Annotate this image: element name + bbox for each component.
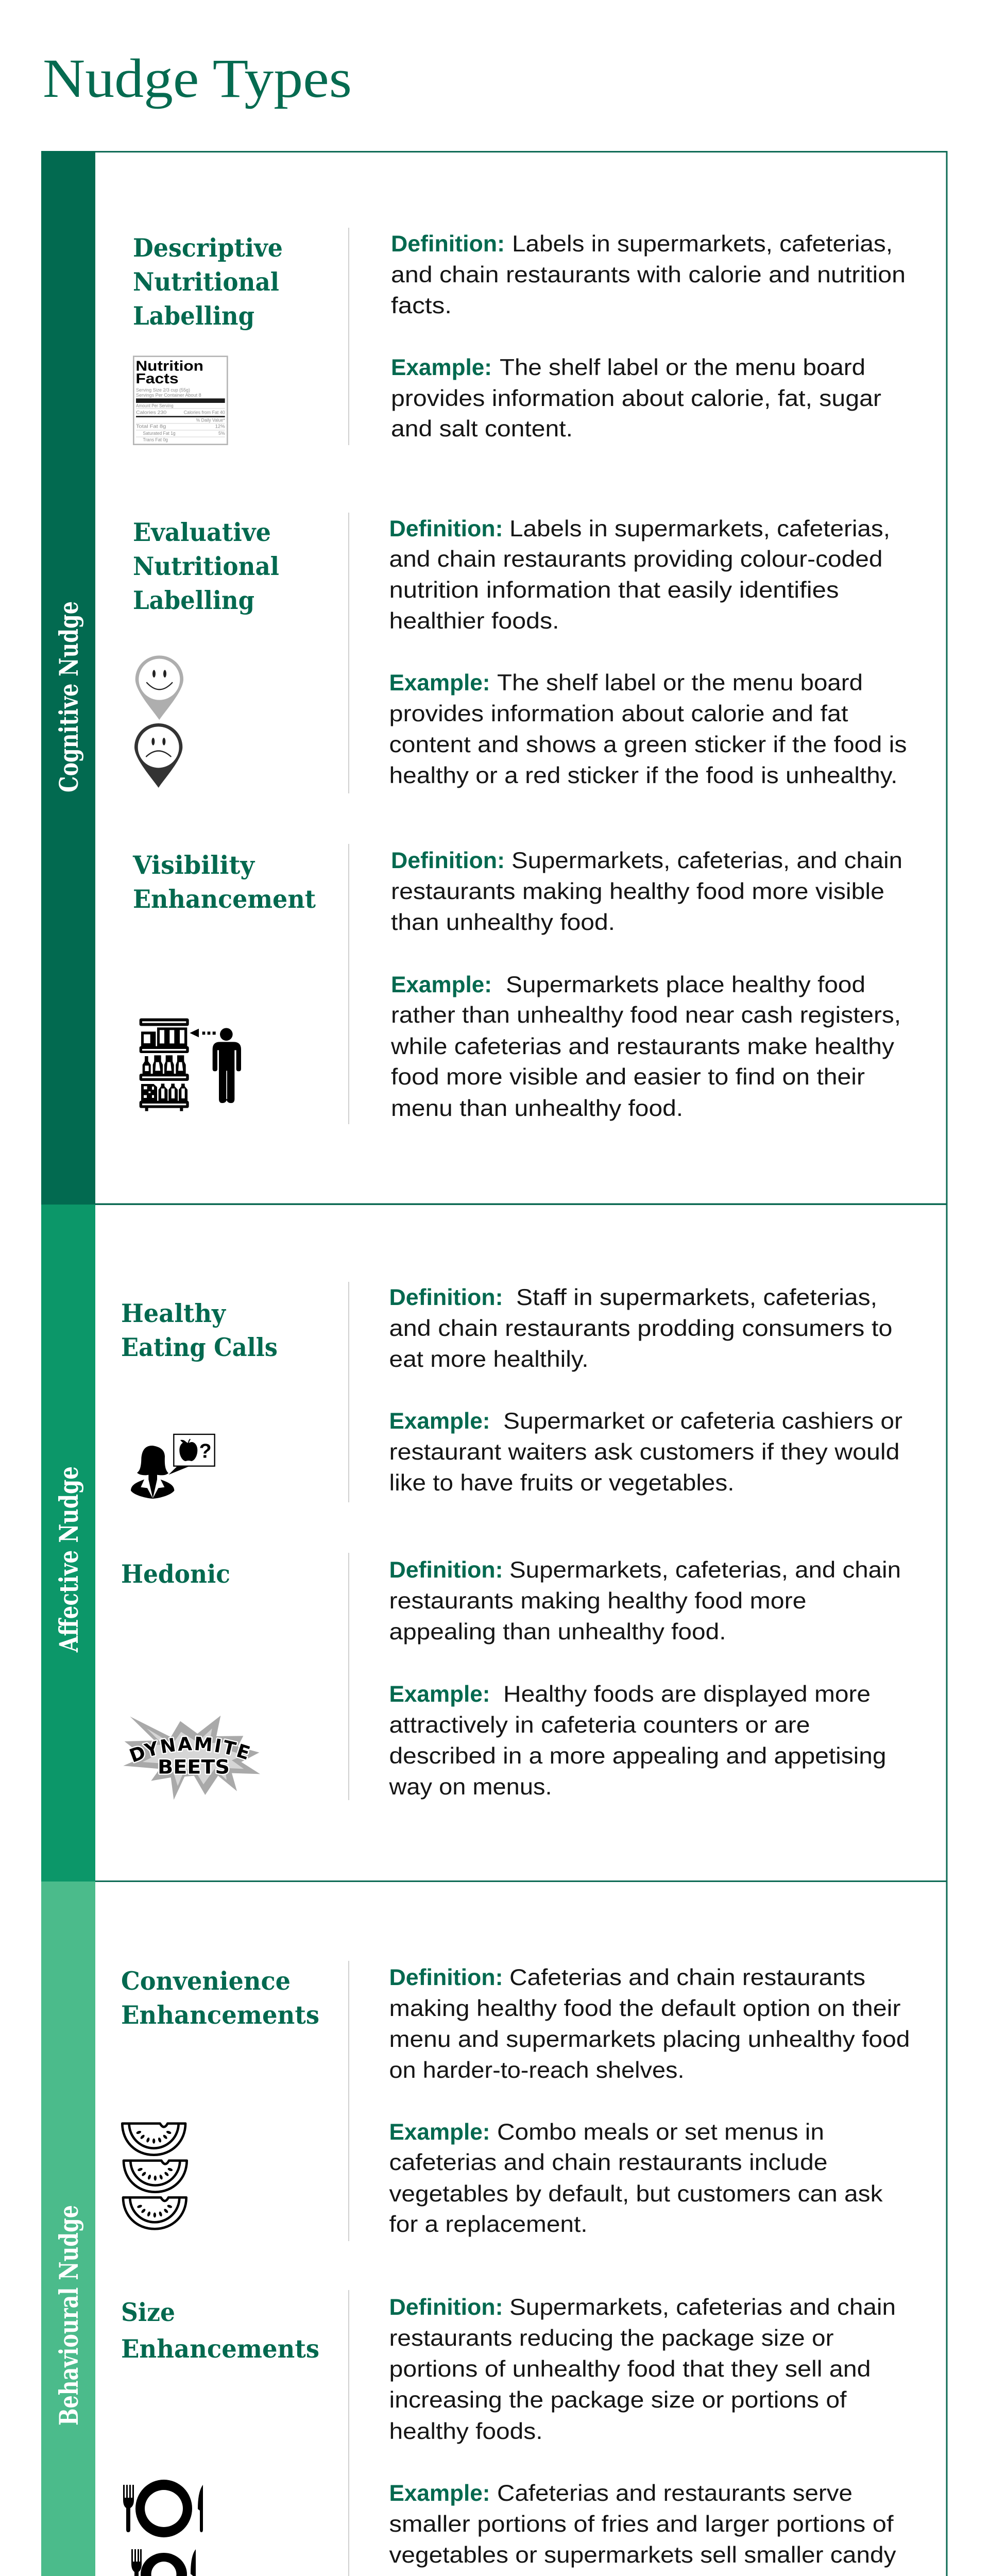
example text: way on menus. [388, 1774, 552, 1800]
example text: like to have fruits or vegetables. [389, 1470, 735, 1496]
heading: healthy eating calls: Healthy [121, 1298, 226, 1328]
definition text: and chain restaurants prodding consumers to [389, 1316, 892, 1341]
example text [389, 670, 907, 788]
divider [348, 2290, 349, 2576]
example text: food more visible and easier to find on their [391, 1064, 865, 1090]
example text: provides information about calorie, fat, sugar [391, 386, 881, 411]
definition text: Definition: [389, 2295, 503, 2320]
divider [348, 513, 349, 793]
definition text: Labels in supermarkets, cafeterias, [512, 231, 893, 257]
icon: nutrition facts label: Facts [135, 370, 179, 386]
icon: nutrition facts label: Amount Per Serving [136, 403, 174, 409]
example text: while cafeterias and restaurants make healthy [390, 1034, 895, 1059]
example text [389, 1409, 902, 1496]
heading: convenience enhancements: Convenience [121, 1966, 291, 1996]
definition text: Definition: [391, 848, 505, 873]
example text: described in a more appealing and appetising [389, 1743, 886, 1769]
heading: convenience enhancements: Enhancements [121, 2000, 319, 2030]
icon: nutrition facts label [133, 357, 227, 445]
definition text [391, 231, 906, 318]
panel: affective nudge [41, 1205, 902, 1882]
definition text: healthy foods. [389, 2419, 543, 2444]
definition text [391, 848, 902, 935]
divider [348, 1553, 349, 1800]
icon: nutrition facts label: Calories from Fat 40 [184, 410, 225, 415]
icon: unhappy pin [134, 723, 182, 788]
example text: for a replacement. [389, 2212, 587, 2237]
icon: happy pin [135, 655, 183, 720]
shelves [140, 1019, 189, 1111]
heading: visibility enhancement: Visibility [132, 850, 255, 880]
example text: healthy or a red sticker if the food is unhealthy. [389, 763, 897, 788]
sidebar: behavioural nudge [41, 1882, 95, 2576]
definition text: than unhealthy food. [391, 910, 615, 935]
definition text: Supermarkets, cafeterias, and chain [509, 1557, 901, 1583]
heading: healthy eating calls: Eating Calls [121, 1332, 278, 1362]
heading: descriptive nutritional labelling: Nutritional [133, 267, 279, 297]
heading: descriptive nutritional labelling: Descriptive [133, 233, 283, 263]
example text: restaurant waiters ask customers if they would [389, 1439, 899, 1465]
row: descriptive nutritional labelling [133, 228, 906, 445]
definition text: restaurants reducing the package size or [389, 2326, 834, 2351]
example text: Combo meals or set menus in [497, 2120, 824, 2145]
definition text: facts. [391, 293, 452, 318]
definition text: restaurants making healthy food more [389, 1588, 807, 1614]
panel: behavioural nudge [41, 1882, 910, 2576]
icon: nutrition facts label: Saturated Fat 1g [143, 431, 176, 436]
row: visibility enhancement [132, 844, 902, 1124]
definition text: appealing than unhealthy food. [389, 1619, 726, 1645]
definition text: Definition: [389, 516, 503, 541]
large plate with cutlery [123, 2480, 203, 2537]
title: Nudge Types [43, 48, 352, 109]
sidebar: affective nudge: Affective Nudge [54, 1466, 84, 1653]
definition text: Supermarkets, cafeterias, and chain [511, 848, 902, 873]
definition text: Labels in supermarkets, cafeterias, [509, 516, 890, 541]
icon: nutrition facts label: Total Fat 8g [136, 424, 166, 429]
heading: descriptive nutritional labelling: Labelling [133, 301, 254, 331]
definition text: and chain restaurants providing colour-coded [389, 547, 883, 572]
example text: Example: [391, 355, 492, 380]
heading: hedonic: Hedonic [121, 1559, 230, 1589]
icon: nutrition facts label: 5% [218, 431, 225, 436]
watermelon slice 1 [122, 2124, 185, 2155]
definition text: Definition: [391, 231, 505, 257]
heading: size enhancements [121, 2297, 319, 2364]
definition text: on harder-to-reach shelves. [389, 2058, 684, 2083]
icon: smiley and sad map pins [134, 655, 183, 788]
example text: The shelf label or the menu board [497, 670, 863, 696]
outer frame [42, 151, 947, 1204]
example text [390, 972, 901, 1121]
example text: content and shows a green sticker if the food is [389, 732, 907, 757]
example text: Cafeterias and restaurants serve [497, 2481, 852, 2506]
watermelon slice 2 [124, 2161, 187, 2192]
definition text: Definition: [389, 1557, 503, 1583]
definition text: menu and supermarkets placing unhealthy food [389, 2027, 910, 2052]
icon: dynamite beets burst: DYNAMITE [129, 1735, 250, 1763]
divider [348, 1961, 349, 2241]
definition text: Definition: [389, 1285, 503, 1310]
definition text: making healthy food the default option on their [389, 1996, 901, 2021]
small plate with cutlery [131, 2549, 196, 2576]
icon: nutrition facts label: Trans Fat 0g [143, 437, 168, 443]
example text: rather than unhealthy food near cash registers, [391, 1003, 901, 1028]
example text: Example: [391, 972, 492, 997]
icon: dynamite beets burst: BEETS [158, 1756, 230, 1778]
row: healthy eating calls [121, 1282, 902, 1502]
definition text: healthier foods. [389, 608, 559, 634]
definition text: eat more healthily. [389, 1347, 588, 1372]
icon: nutrition facts label: 12% [215, 424, 225, 429]
example text [389, 2481, 896, 2576]
heading: convenience enhancements [121, 1966, 319, 2030]
heading: size enhancements: Enhancements [121, 2334, 319, 2364]
example text: The shelf label or the menu board [500, 355, 865, 380]
definition text: and chain restaurants with calorie and nutrition [391, 262, 906, 287]
example text [388, 1682, 886, 1800]
icon: nutrition facts label: Serving Size 2/3 cup (55g) [136, 387, 190, 393]
row: evaluative nutritional labelling [133, 513, 907, 793]
example text: Example: [389, 2120, 490, 2145]
definition text: nutrition information that easily identifies [389, 578, 839, 603]
example text: Example: [389, 1409, 490, 1434]
icon: nutrition facts label: Calories 230 [136, 410, 166, 415]
example text: Example: [389, 670, 490, 696]
panel: cognitive nudge [41, 151, 907, 1205]
heading: healthy eating calls [121, 1298, 278, 1362]
definition text [389, 516, 890, 634]
divider [348, 1282, 349, 1502]
example text: cafeterias and chain restaurants include [389, 2150, 827, 2175]
divider [348, 844, 349, 1124]
icon: nutrition facts label: Nutrition [135, 358, 203, 374]
icon: staff member asking about fruit [131, 1434, 215, 1499]
heading: evaluative nutritional labelling [133, 517, 279, 615]
row: convenience enhancements [121, 1961, 910, 2241]
sidebar: affective nudge [41, 1205, 95, 1882]
row: hedonic [121, 1553, 901, 1800]
example text: provides information about calorie and fat [389, 701, 848, 726]
example text: vegetables by default, but customers can ask [389, 2181, 883, 2207]
example text: Healthy foods are displayed more [503, 1682, 871, 1707]
definition text [389, 2295, 896, 2444]
definition text: Staff in supermarkets, cafeterias, [516, 1285, 877, 1310]
heading: visibility enhancement: Enhancement [133, 884, 316, 914]
definition text: increasing the package size or portions of [389, 2387, 847, 2413]
example text [391, 355, 881, 442]
icon: store shelf and shopper [140, 1019, 241, 1111]
sidebar: behavioural nudge: Behavioural Nudge [54, 2205, 84, 2426]
example text: attractively in cafeteria counters or are [389, 1713, 810, 1738]
definition text: portions of unhealthy food that they sell and [389, 2357, 871, 2382]
heading: size enhancements: Size [121, 2297, 175, 2327]
speech bubble: ? [199, 1439, 212, 1462]
heading: evaluative nutritional labelling: Nutritional [133, 551, 279, 581]
definition text: Cafeterias and chain restaurants [509, 1965, 865, 1990]
heading: descriptive nutritional labelling [133, 233, 283, 331]
icon: nutrition facts label: % Daily Value* [196, 418, 225, 423]
heading: evaluative nutritional labelling: Labelling [133, 585, 254, 615]
example text: Supermarket or cafeteria cashiers or [503, 1409, 902, 1434]
person [213, 1028, 241, 1103]
definition text: Supermarkets, cafeterias and chain [509, 2295, 896, 2320]
definition text [389, 1965, 910, 2083]
example text: and salt content. [391, 416, 573, 442]
definition text [389, 1557, 901, 1645]
person [131, 1446, 174, 1499]
icon: large and small plates [123, 2480, 203, 2576]
divider [348, 228, 349, 445]
row: size enhancements [121, 2290, 896, 2576]
example text: Example: [389, 1682, 490, 1707]
example text: Example: [389, 2481, 490, 2506]
heading: evaluative nutritional labelling: Evaluative [133, 517, 271, 547]
icon: three watermelon slices [122, 2124, 187, 2229]
example text: vegetables or supermarkets sell smaller candy [389, 2543, 896, 2568]
example text: menu than unhealthy food. [391, 1096, 683, 1121]
definition text [389, 1285, 892, 1372]
icon: nutrition facts label: Servings Per Container About 8 [136, 393, 201, 398]
example text: Supermarkets place healthy food [506, 972, 865, 997]
arrow [190, 1029, 216, 1037]
icon: dynamite beets burst [124, 1716, 260, 1800]
definition text: restaurants making healthy food more visible [391, 879, 884, 904]
example text: smaller portions of fries and larger portions of [389, 2512, 894, 2537]
watermelon slice 3 [123, 2197, 186, 2229]
example text [389, 2120, 883, 2237]
sidebar: cognitive nudge [41, 151, 95, 1205]
heading: visibility enhancement [132, 850, 316, 914]
definition text: Definition: [389, 1965, 503, 1990]
speech bubble [168, 1434, 215, 1475]
sidebar: cognitive nudge: Cognitive Nudge [54, 601, 84, 792]
